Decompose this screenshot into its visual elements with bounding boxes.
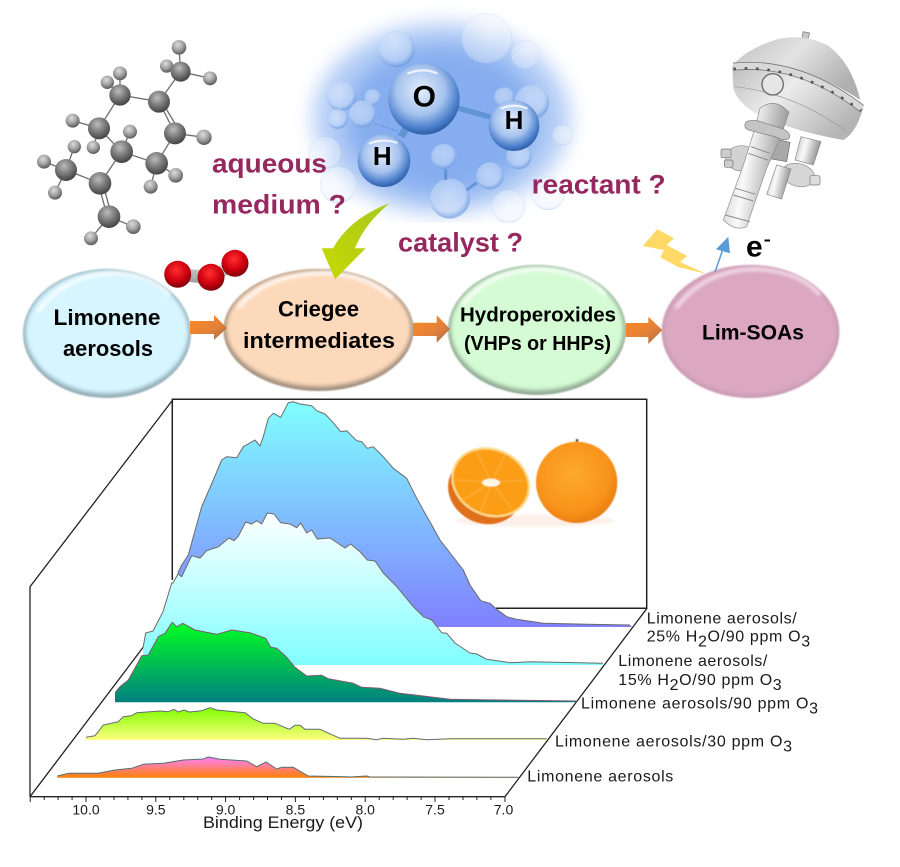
x axis tick labels: 7.5 [425, 802, 445, 818]
inner blue glow [345, 45, 538, 195]
series labels: 3 [773, 677, 782, 694]
x axis tick labels: 8.0 [355, 802, 375, 818]
hydrogen atoms [37, 40, 217, 245]
node: Limonene aerosols [23, 269, 191, 398]
chart: 3D photoelectron spectra [30, 399, 819, 832]
flange [733, 66, 862, 108]
x axis tick labels [72, 802, 513, 818]
main tube [723, 103, 789, 228]
icon: lightning bolt [643, 229, 707, 274]
label O: O [413, 81, 436, 114]
node: Criegee intermediates [224, 269, 414, 391]
node: Hydroperoxides: (VHPs or HHPs) [464, 333, 611, 355]
whole orange [536, 439, 617, 523]
side cylinders [795, 137, 821, 165]
arrow: electron emission [715, 237, 730, 272]
carbon atoms [55, 62, 191, 228]
chamber body [732, 66, 863, 140]
series labels: 3 [809, 700, 819, 717]
cut orange [437, 436, 540, 536]
label: electron [746, 231, 770, 264]
node: Limonene aerosols: aerosols [63, 336, 153, 361]
node: Lim-SOAs: Lim-SOAs [702, 320, 804, 344]
chart frame: back wall [30, 399, 647, 797]
left hydrogen sphere [358, 134, 410, 187]
x axis tick labels: 8.5 [286, 802, 305, 818]
outer blue glow [313, 23, 570, 213]
text: aqueous medium: medium ? [212, 189, 346, 219]
series labels [527, 610, 819, 786]
body seam [735, 87, 847, 132]
arrow: Limonene to Criegee [190, 315, 227, 340]
top knob [801, 32, 810, 45]
x axis with ticks [30, 797, 505, 802]
collar plate [745, 120, 790, 140]
illustration: water molecule with bubbles [309, 13, 572, 223]
spectrum: 25% H2O / 90 ppm O3 [178, 402, 632, 627]
tube rings [725, 147, 770, 222]
series labels: Limonene aerosols/30 ppm O [555, 734, 783, 751]
series labels: Limonene aerosols/ [647, 610, 797, 627]
icon: ozone molecule [164, 250, 248, 291]
bonds between bubbles [375, 107, 492, 190]
arrow: Hydroperoxides to Lim-SOAs [626, 317, 662, 344]
node: Criegee intermediates: Criegee [278, 297, 359, 322]
illustration: oranges [437, 436, 617, 536]
label H left: H [373, 141, 392, 171]
series labels: 3 [801, 634, 811, 651]
text: aqueous medium [212, 149, 346, 219]
bonds [44, 47, 210, 238]
spectrum: 90 ppm O3 [115, 622, 577, 702]
x axis title: Binding Energy (eV) [203, 813, 363, 832]
series labels: 15% H [618, 672, 670, 689]
spectrum: 15% H2O / 90 ppm O3 [143, 513, 604, 665]
arrow: Criegee to Hydroperoxides [413, 315, 450, 343]
arrow: green curved arrow [322, 203, 389, 279]
series labels: O/90 ppm O [679, 672, 773, 689]
sphere highlights [370, 70, 527, 143]
oxygen sphere [388, 63, 460, 135]
x axis tick labels: 9.0 [216, 802, 236, 818]
dome [735, 37, 860, 100]
x axis tick labels: 7.0 [494, 802, 513, 818]
background bubbles [309, 13, 572, 223]
node: Hydroperoxides: Hydroperoxides [460, 305, 616, 327]
node: Limonene aerosols: Limonene [54, 305, 160, 330]
right hydrogen sphere [489, 100, 539, 151]
text: catalyst: catalyst ? [398, 228, 523, 258]
molecule: limonene ball and stick [37, 40, 217, 245]
spectrum: 30 ppm O3 [86, 708, 547, 740]
text: aqueous medium: aqueous [212, 149, 327, 179]
x axis tick labels: 9.5 [146, 802, 166, 818]
side flange plates [726, 146, 758, 171]
node: Hydroperoxides [448, 265, 626, 395]
view port [762, 74, 783, 95]
series labels: 3 [783, 739, 793, 756]
series labels: Limonene aerosols/90 ppm O [581, 695, 809, 712]
spectrum: limonene aerosols [57, 757, 518, 778]
series labels: 25% H [647, 629, 698, 646]
series labels: 2 [698, 634, 708, 651]
illustration: analyser chamber [721, 32, 863, 228]
series labels: Limonene aerosols/ [618, 653, 768, 670]
series labels: O/90 ppm O [708, 629, 801, 646]
label H right: H [505, 105, 523, 135]
text: reactant: reactant ? [532, 169, 666, 199]
series labels: 2 [670, 677, 679, 694]
label: electron: e [746, 231, 763, 264]
series labels: Limonene aerosols [527, 769, 673, 786]
node: Lim-SOAs [662, 265, 839, 398]
node: Criegee intermediates: intermediates [243, 328, 395, 353]
x axis tick labels: 10.0 [72, 802, 100, 818]
table shadow [455, 515, 615, 527]
